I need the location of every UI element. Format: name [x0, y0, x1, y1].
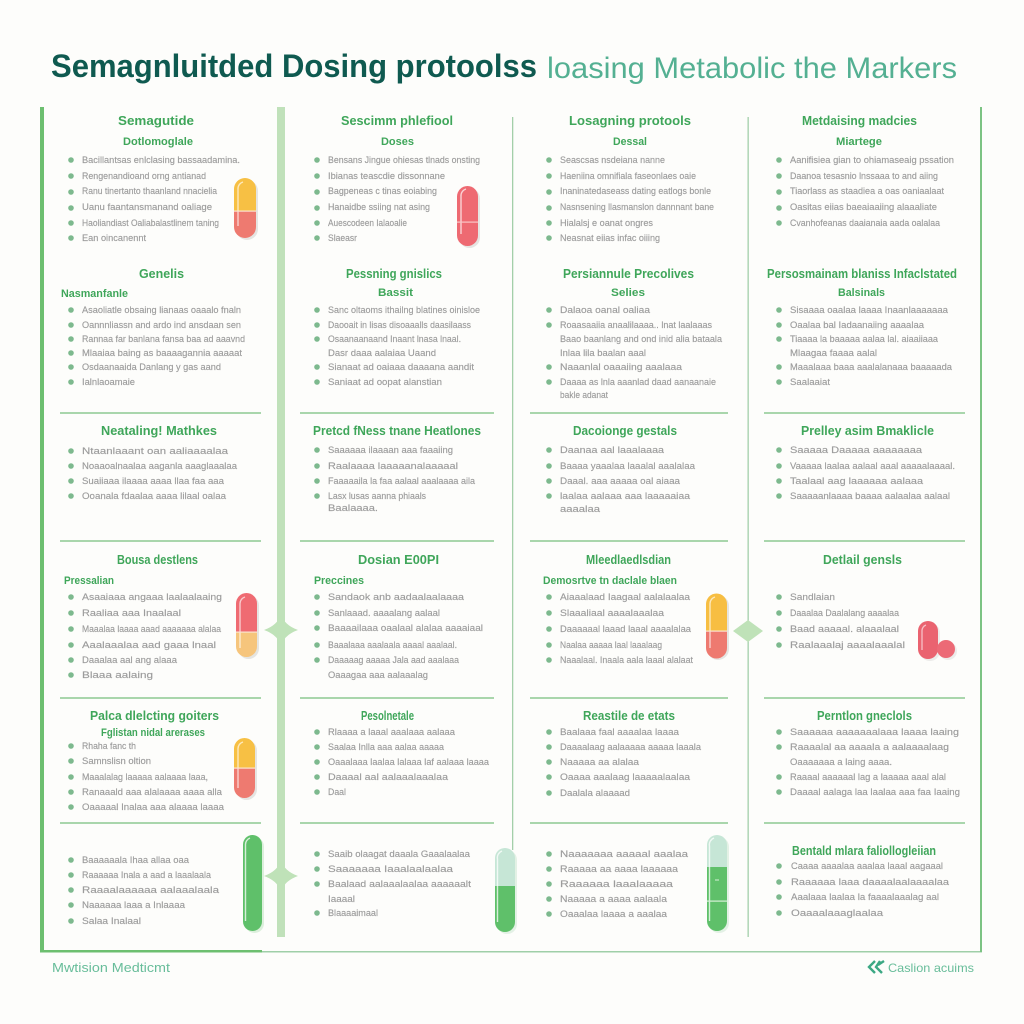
bullet list [546, 155, 714, 244]
bullet list [68, 741, 225, 813]
heading: Perntlon gneclols [817, 709, 912, 723]
bullet list: Raaaaa aa aaaa laaaaaa [560, 864, 679, 875]
row dividers [60, 413, 965, 823]
bullet list: Samnslisn oltion [82, 756, 151, 767]
bullet list: Haeniina omnifiala faseonlaes oaie [560, 171, 696, 182]
bullet list: Rengenandioand orng antianad [82, 171, 206, 182]
icon: yellow and coral capsule [234, 738, 257, 800]
heading: Metdaising madcies [802, 114, 917, 128]
panel: row 2 column 2 [314, 267, 480, 388]
bullet list: Daalala alaaaad [560, 788, 630, 799]
icon: yellow and coral capsule [706, 594, 729, 660]
subheading: Balsinals [838, 287, 885, 299]
bullet list: Ean oincanennt [82, 233, 146, 244]
icon: diamond connector right [733, 620, 763, 642]
bullet list: Saalaaiat [790, 377, 830, 388]
bullet list: laalaa aalaaa aaa laaaaaiaa [560, 491, 691, 502]
bullet list: Asaoliatle obsaing lianaas oaaalo fnaln [82, 305, 241, 316]
bullet list: Daaalaa Daalalang aaaalaa [790, 608, 900, 619]
bullet list: Inlaa lila baalan aaal [560, 348, 646, 359]
bullet list: Baalaaaa. [328, 503, 378, 514]
heading: Semagutide [118, 114, 194, 128]
bullet list: Sianaat ad oaiaaa daaaana aandit [328, 362, 474, 373]
bullet list: Raalaaaa laaaaanalaaaaal [328, 461, 458, 472]
subheading: Pressalian [64, 575, 114, 587]
bullet list: Daaalaa aal ang alaaa [82, 655, 178, 666]
bullet list: Neasnat eiias infac oiiing [560, 233, 660, 244]
panel: row 6 column 1 [68, 835, 264, 933]
heading: Detlail gensls [823, 553, 902, 567]
bullet list: Auescodeen Ialaoalie [328, 218, 407, 229]
panel: row 1 column 1 [68, 114, 258, 244]
subheading: Dotlomoglale [123, 136, 193, 148]
subheading: Fglistan nidal arerases [101, 727, 205, 739]
bullet list: Baao baanlang and ond inid alia bataala [560, 334, 723, 345]
bullet list: Naaanlal oaaaiing aaalaaa [560, 362, 683, 373]
bullet list: Baaaaaala Ihaa allaa oaa [82, 855, 190, 866]
bullet list: Raaaalaaaaaa aalaaalaala [82, 885, 220, 896]
bullet list [546, 445, 696, 515]
bullet list: Raaaaaa Inala a aad a laaalaala [82, 870, 212, 881]
icon: red capsule and tablet [918, 621, 957, 661]
heading: Dosian E00PI [358, 553, 439, 567]
bullet list: Daanoa tesasnio lnssaaa to and aiing [790, 171, 938, 182]
heading: Genelis [139, 267, 184, 281]
bullet list: Raaaaaa laaa daaaalaalaaaalaa [791, 877, 950, 888]
panel: row 5 column 1 [68, 709, 257, 813]
bullet list: Raalaaalaj aaaalaaalal [790, 640, 905, 651]
panel: row 2 column 1 [61, 267, 245, 388]
bullet list: Rhaha fanc th [82, 741, 136, 752]
bullet list: Iaaaal [328, 894, 355, 905]
bullet list: Saalaa Inlla aaa aalaa aaaaa [328, 742, 445, 753]
subheading: Bassit [378, 287, 413, 299]
bullet list: Baaaa yaaalaa laaalal aaalalaa [560, 461, 696, 472]
bullet list: Oaalaa bal Iadaanaiing aaaalaa [790, 320, 925, 331]
heading: Pessning gnislics [346, 267, 442, 281]
bullet list: Saaib olaagat daaala Gaaalaalaa [328, 849, 471, 860]
heading: Dacoionge gestals [573, 424, 677, 438]
panel: row 4 column 4 [776, 553, 957, 661]
bullet list: Oaaalaa laaaa a aaalaa [560, 909, 668, 920]
bullet list: Oaaaa aaalaag laaaaalaalaa [560, 772, 691, 783]
heading: Persiannule Precolives [563, 267, 694, 281]
bullet list [314, 155, 480, 244]
subheading: Doses [381, 136, 414, 148]
bullet list: Ranaaald aaa alalaaaa aaaa alla [82, 787, 223, 798]
bullet list: Sisaaaa oaalaa laaaa Inaanlaaaaaaa [790, 305, 949, 316]
panel: row 6 column 4 [776, 844, 950, 919]
bullet list: Saaaaanlaaaa baaaa aalaalaa aalaal [790, 491, 950, 502]
panel: row 6 column 3 [546, 835, 729, 933]
bullet list: Oaaaaaaa a laing aaaa. [790, 757, 892, 768]
bullet list: Raaaaaa laaalaaaaa [560, 879, 674, 890]
panel: row 2 column 3 [546, 267, 723, 401]
bullet list: Bensans Jingue ohiesas tlnads onsting [328, 155, 480, 166]
panel: row 5 column 4 [776, 709, 960, 798]
panel: row 1 column 3 [546, 114, 714, 244]
bullet list [314, 305, 480, 388]
bullet list [776, 727, 960, 798]
bullet list: Daaaal aal aalaaalaaalaa [328, 772, 449, 783]
bullet list: Raaaalal aa aaaala a aalaaaalaag [790, 742, 949, 753]
bullet list [546, 849, 689, 920]
heading: Bousa destlens [117, 553, 198, 567]
bullet list: Daaaalaag aalaaaaa aaaaa laaala [560, 742, 702, 753]
bullet list: Hialalsj e oanat ongres [560, 218, 653, 229]
subheading: Nasmanfanle [61, 288, 128, 300]
bullet list: Baad aaaaal. alaaalaal [790, 624, 899, 635]
bullet list: Oaaaaal Inalaa aaa alaaaa laaaa [82, 802, 225, 813]
bullet list: Blaaaaimaal [328, 908, 378, 919]
bullet list: Haoliandiast Oaliabalastlinem taning [82, 218, 219, 229]
bullet list: Naalaa aaaaa laal laaalaag [560, 640, 662, 651]
bullet list: Naaaaa aa alalaa [560, 757, 640, 768]
bullet list [314, 727, 490, 798]
panel: row 4 column 2 [314, 553, 483, 681]
bullet list: Daanaa aal laaalaaaa [560, 445, 665, 456]
panel: row 4 column 1 [64, 553, 259, 681]
bullet list: Inaninatedaseass dating eatlogs bonle [560, 186, 711, 197]
title: Semagnluitded Dosing protoolss [51, 48, 537, 84]
bullet list: Saaaaaaa Iaaalaalaalaa [328, 864, 454, 875]
bullet list: Sanlaaad. aaaalang aalaal [328, 608, 440, 619]
icon: light and green capsule [495, 848, 517, 934]
bullet list: Salaa Inalaal [82, 916, 141, 927]
subheading: Dessal [613, 136, 647, 148]
bullet list: Sandlaian [790, 592, 835, 603]
bullet list [68, 592, 222, 681]
panel: row 2 column 4 [767, 267, 957, 388]
bullet list: Faaaaaila la faa aalaal aaalaaaa aila [328, 476, 476, 487]
bullet list: Baaaailaaa oaalaal alalaa aaaaiaal [328, 623, 483, 634]
bullet list [546, 305, 723, 401]
bullet list: Cvanhofeanas daaianaia aada oalalaa [790, 218, 941, 229]
bullet list: Baalaad aalaaalaalaa aaaaaalt [328, 879, 471, 890]
bullet list: Asaaiaaa angaaa laalaalaaing [82, 592, 222, 603]
bullet list: Daaaaaal laaad laaal aaaalalaa [560, 624, 692, 635]
bullet list: Maaalalag laaaaa aalaaaa laaa, [82, 772, 208, 783]
panel: row 4 column 3 [543, 553, 729, 666]
bullet list [546, 592, 693, 666]
bullet list: Daal [328, 787, 346, 798]
bullet list: Oasitas eiias baeaiaaiing alaaaliate [790, 202, 937, 213]
bullet list: Mlaaiaa baing as baaaagannia aaaaat [82, 348, 242, 359]
bullet list [314, 849, 471, 919]
subheading: Selies [611, 287, 645, 299]
bullet list: Tiaorlass as staadiea a oas oaniaalaat [790, 186, 944, 197]
bullet list: Suaiiaaa ilaaaa aaaa llaa faa aaa [82, 476, 225, 487]
bullet list: Aiaaalaad Iaagaal aalalaalaa [560, 592, 691, 603]
frame and column dividers [40, 107, 982, 952]
bullet list: Naaaaa a aaaa aalaala [560, 894, 668, 905]
bullet list [68, 446, 238, 502]
bullet list: Caaaa aaaalaa aaalaa laaal aagaaal [791, 861, 943, 872]
bullet list [314, 592, 483, 681]
bullet list: Daaaal aalaga laa laalaa aaa faa Iaaing [790, 787, 960, 798]
heading: Mleedlaedlsdian [586, 553, 671, 567]
icon: red capsule [457, 186, 480, 248]
bullet list: Dalaoa oanal oaliaa [560, 305, 651, 316]
bullet list: Tiaaaa la baaaaa aalaa lal. aiaaiiaaa [790, 334, 939, 345]
bullet list: Bagpeneas c tinas eoiabing [328, 186, 437, 197]
heading: Pretcd fNess tnane Heatlones [313, 424, 481, 438]
footer right with logo: Caslion acuims [888, 961, 974, 975]
bullet list [776, 305, 953, 388]
heading: Losagning protools [569, 114, 691, 128]
bullet list: Taalaal aag laaaaaa aalaaa [790, 476, 924, 487]
bullet list: Nasnsening llasmanslon dannnant bane [560, 202, 714, 213]
bullet list: Oaaagaa aaa aalaaalag [328, 670, 428, 681]
bullet list: Bacillantsas enlclasing bassaadamina. [82, 155, 240, 166]
bullet list: Raaaal aaaaaal lag a laaaaa aaal alal [790, 772, 946, 783]
panel: row 3 column 4 [776, 424, 955, 502]
panel: row 6 column 2 [314, 848, 517, 934]
bullet list [546, 727, 702, 799]
bullet list: Aaalaaa laalaa la faaaalaaalag aal [791, 892, 939, 903]
bullet list: Ooanala fdaalaa aaaa lilaal oalaa [82, 491, 227, 502]
bullet list: Maaalaaa baaa aaalalanaaa baaaaada [790, 362, 953, 373]
bullet list [314, 445, 476, 514]
bullet list: Daaaaag aaaaa Jala aad aaalaaa [328, 655, 460, 666]
bullet list: Osaanaanaand Inaant lnasa lnaal. [328, 334, 461, 345]
icon: tall green capsule [243, 835, 264, 933]
bullet list: Oaaalaaa laalaa lalaaa laf aalaaa laaaa [328, 757, 490, 768]
bullet list: Dasr daaa aalaiaa Uaand [328, 348, 436, 359]
bullet list: Sandaok anb aadaalaalaaaa [328, 592, 465, 603]
bullet list: Baaalaaa aaalaala aaaal aaalaal. [328, 640, 457, 651]
heading: Bentald mlara faliollogleiian [792, 844, 936, 858]
heading: Palca dlelcting goiters [90, 709, 219, 723]
bullet list: Saaaaaa ilaaaan aaa faaaiing [328, 445, 453, 456]
bullet list: Seascsas nsdeiana nanne [560, 155, 665, 166]
bullet list [68, 155, 240, 244]
bullet list [776, 445, 955, 502]
bullet list: Saaaaaa aaaaaaalaaa laaaa laaing [790, 727, 959, 738]
bullet list: Noaaoalnaalaa aaganla aaaglaaalaa [82, 461, 238, 472]
bullet list: Oaaaalaaaglaalaa [791, 908, 884, 919]
bullet list: Maaalaa laaaa aaad aaaaaaa alalaa [82, 624, 222, 635]
bullet list [68, 305, 245, 388]
panel: row 5 column 2 [314, 709, 490, 798]
bullet list: Osdaanaaida Danlang y gas aand [82, 362, 221, 373]
title [51, 48, 957, 85]
bullet list: Rannaa far banlana fansa baa ad aaavnd [82, 334, 245, 345]
bullet list: Mlaagaa faaaa aalal [790, 348, 877, 359]
icon: red and peach capsule [236, 593, 259, 659]
panel: row 1 column 4 [776, 114, 954, 229]
bullet list: Ibianas teascdie dissonnane [328, 171, 445, 182]
icon: diamond connector left upper [264, 614, 298, 646]
heading: Persosmainam blaniss Infaclstated [767, 267, 957, 281]
bullet list [776, 861, 950, 919]
bullet list: Ranu tinertanto thaanland nnacielia [82, 186, 218, 197]
bullet list [68, 855, 220, 927]
heading: Prelley asim Bmaklicle [801, 424, 934, 438]
bullet list: Aaalaaalaa aad gaaa lnaal [82, 640, 216, 651]
footer left: Mwtision Medticmt [52, 960, 170, 975]
bullet list: Naaalaal. Inaala aala laaal alalaat [560, 655, 693, 666]
panel: row 3 column 2 [313, 424, 481, 514]
bullet list: Hanaidbe ssiing nat asing [328, 202, 430, 213]
bullet list: Rlaaaa a laaal aaalaaa aalaaa [328, 727, 456, 738]
heading: Reastile de etats [583, 709, 675, 723]
bullet list: Aanifisiea gian to ohiamaseaig pssation [790, 155, 954, 166]
bullet list: Slaeasr [328, 233, 357, 244]
icon: diamond connector left lower [264, 860, 298, 892]
heading: Neataling! Mathkes [101, 424, 217, 438]
panel: row 3 column 3 [546, 424, 696, 515]
bullet list: Baalaaa faal aaaalaa laaaa [560, 727, 680, 738]
subheading: Demosrtve tn daclale blaen [543, 575, 677, 587]
bullet list: Ialnlaoamaie [82, 377, 135, 388]
heading: Pesolnetale [361, 709, 414, 723]
bullet list: Naaaaaaa aaaaal aaalaa [560, 849, 689, 860]
title: loasing Metabolic the Markers [547, 52, 957, 85]
bullet list: Oannnliassn and ardo ind ansdaan sen [82, 320, 241, 331]
subheading: Preccines [314, 575, 364, 587]
heading: Sescimm phlefiool [341, 114, 453, 128]
bullet list: Slaaaliaal aaaalaaalaa [560, 608, 665, 619]
bullet list: Daaal. aaa aaaaa oal aiaaa [560, 476, 681, 487]
panel: row 5 column 3 [546, 709, 702, 799]
bullet list [776, 155, 954, 229]
bullet list: Roaasaaiia anaalilaaaa.. lnat laalaaas [560, 320, 712, 331]
subheading: Miartege [836, 136, 882, 148]
bullet list: bakle adanat [560, 390, 608, 401]
bullet list: Vaaaaa laalaa aalaal aaal aaaaalaaaal. [790, 461, 955, 472]
bullet list: Naaaaaa laaa a Inlaaaa [82, 900, 186, 911]
bullet list: Lasx lusas aanna phiaals [328, 491, 426, 502]
bullet list: Ntaanlaaant oan aaliaaaalaa [82, 446, 229, 457]
bullet list: Uanu faantansmanand oaliage [82, 202, 212, 213]
panel: row 1 column 2 [314, 114, 480, 248]
bullet list: Sanc oltaoms ithailng blatines oinisloe [328, 305, 480, 316]
bullet list: Daaaa as lnla aaanlad daad aanaanaie [560, 377, 716, 388]
icon: green gauge capsule [707, 835, 729, 933]
bullet list: Daooait in lisas disoaaalls daasilaass [328, 320, 471, 331]
bullet list: Saniaat ad oopat alanstian [328, 377, 442, 388]
icon: yellow and coral capsule [234, 178, 258, 240]
bullet list: Raaliaa aaa Inaalaal [82, 608, 181, 619]
bullet list: aaaalaa [560, 504, 601, 515]
bullet list: Blaaa aalaing [82, 670, 153, 681]
bullet list [776, 592, 905, 651]
bullet list: Saaaaa Daaaaa aaaaaaaa [790, 445, 923, 456]
panel: row 3 column 1 [68, 424, 238, 502]
